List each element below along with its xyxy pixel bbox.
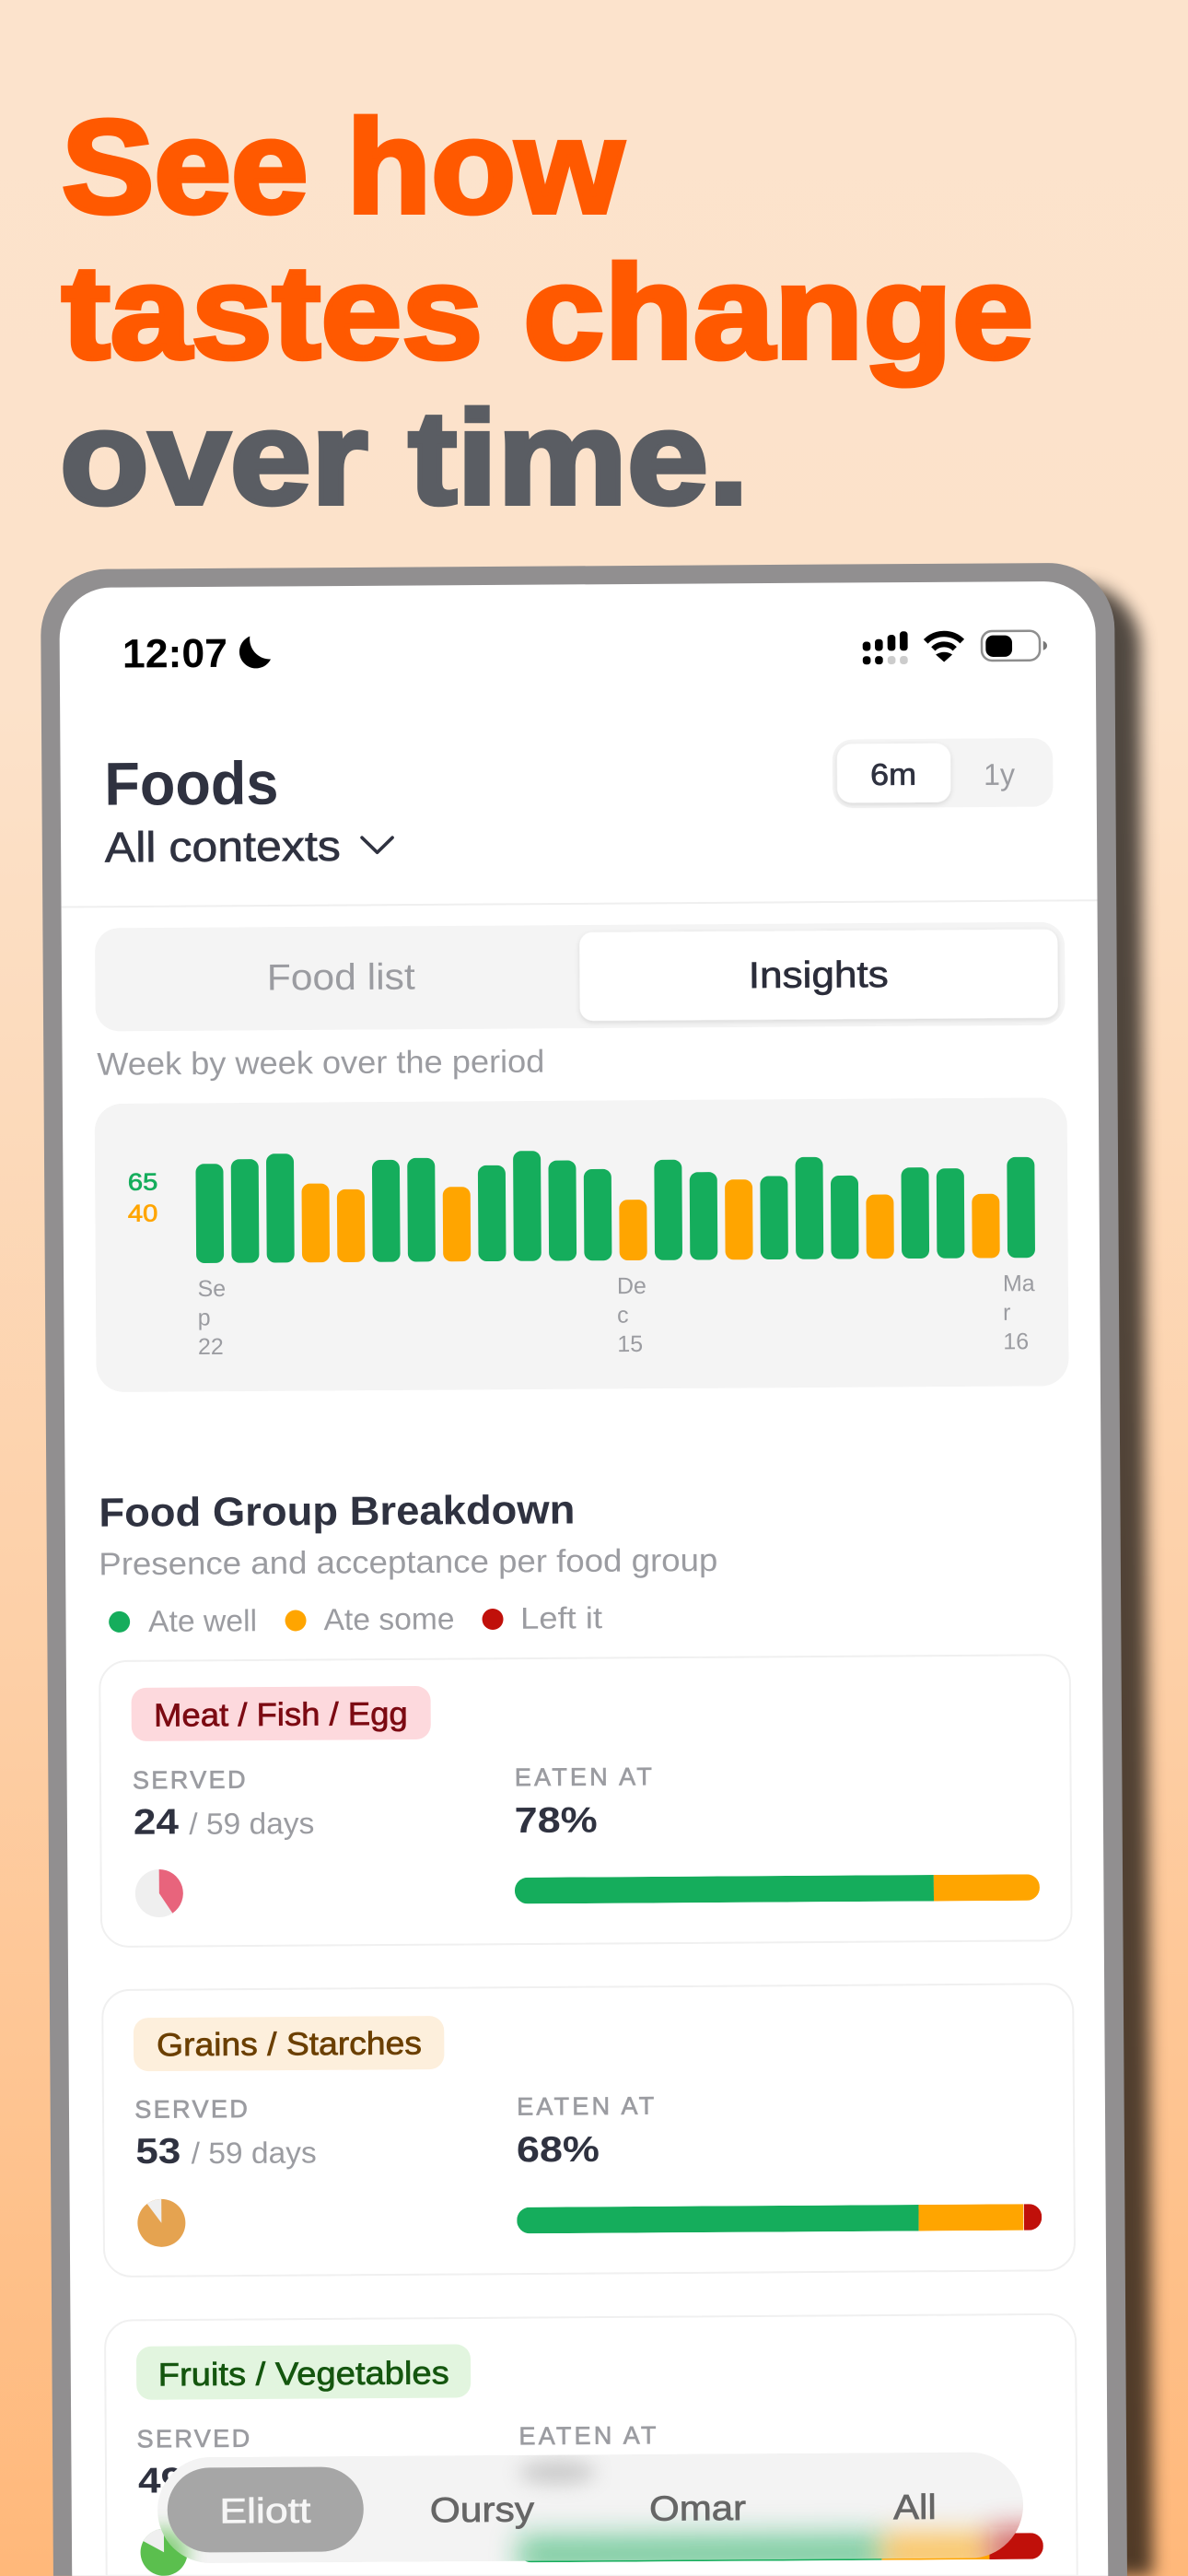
section subtitle: Presence and acceptance per food group — [99, 1543, 717, 1582]
eaten stat — [514, 1762, 652, 1841]
tabs: Insights — [749, 954, 889, 996]
phone screen — [59, 581, 1108, 2576]
chart date labels: 16 — [1003, 1329, 1029, 1354]
tabs: Food list — [267, 957, 415, 999]
selected tab: Eliott: Eliott — [219, 2492, 311, 2531]
tag: Meat / Fish / Egg — [154, 1696, 408, 1734]
icon: wifi — [926, 634, 962, 662]
eaten stat: 78% — [515, 1800, 598, 1841]
period toggle: 6m — [870, 757, 916, 791]
chart date labels: Se — [197, 1276, 226, 1302]
chart scale labels — [127, 1168, 158, 1227]
served stat — [136, 2425, 250, 2501]
pie chart — [137, 2199, 186, 2247]
served stat — [133, 1765, 314, 1843]
phone shadow — [66, 582, 1153, 2576]
chart scale labels: 65 — [128, 1168, 157, 1196]
pie chart — [135, 1869, 183, 1917]
icon: cellular signal — [863, 631, 908, 664]
panel: weekly chart — [95, 1097, 1069, 1392]
icon: chevron — [362, 837, 392, 852]
tabs — [95, 922, 1066, 1031]
stacked bar — [515, 1874, 1040, 1903]
served stat: SERVED — [133, 1766, 246, 1794]
clock: 12:07 — [122, 631, 227, 677]
legend: Ate well — [148, 1603, 257, 1638]
chart date labels: De — [617, 1273, 646, 1299]
served stat: 49 — [138, 2461, 183, 2501]
chart date labels: 15 — [617, 1331, 643, 1357]
chart date labels: 22 — [198, 1334, 224, 1360]
period toggle — [833, 738, 1054, 808]
title: tastes change — [62, 238, 1033, 387]
eaten stat — [517, 2092, 655, 2170]
title: over time. — [60, 383, 749, 533]
nav glass background — [157, 2453, 1023, 2563]
panel: Fruits / Vegetables — [105, 2314, 1077, 2576]
served stat: SERVED — [136, 2425, 250, 2453]
bottom navigation bar — [157, 2453, 1023, 2563]
icon: moon — [239, 637, 271, 669]
chart date labels: p — [198, 1305, 211, 1331]
stacked bar — [517, 2204, 1042, 2233]
chart date labels: c — [617, 1303, 629, 1329]
served stat: 53 — [135, 2132, 181, 2172]
status bar — [122, 626, 1047, 677]
tag: Grains / Starches — [157, 2025, 422, 2063]
title — [60, 92, 1033, 533]
selected tab: Eliott — [167, 2466, 364, 2553]
chart subtitle: Week by week over the period — [97, 1045, 544, 1083]
context dropdown: All contexts — [105, 822, 341, 871]
eaten stat: EATEN AT — [518, 2421, 657, 2450]
chart date labels: Ma — [1003, 1270, 1035, 1296]
title: See how — [62, 92, 624, 241]
panel: Grains / Starches — [102, 1984, 1075, 2277]
tag — [136, 2344, 471, 2400]
stacked bar — [518, 2533, 1043, 2562]
eaten stat: EATEN AT — [517, 2092, 654, 2121]
tag — [132, 1686, 431, 1741]
phone frame — [41, 563, 1127, 2576]
legend: Ate some — [323, 1601, 455, 1636]
served stat: 24 — [134, 1802, 179, 1843]
phone mockup — [41, 562, 1153, 2576]
pie chart — [140, 2529, 188, 2576]
tab: Omar: Omar — [649, 2489, 747, 2529]
served stat: / 59 days — [189, 1807, 314, 1841]
served stat: SERVED — [134, 2095, 248, 2124]
status icons — [863, 630, 1047, 664]
icon: battery — [982, 631, 1047, 661]
tab: Oursy: Oursy — [430, 2491, 534, 2530]
tag — [134, 2016, 444, 2071]
period toggle: 1y — [984, 757, 1016, 791]
heading: Food Group Breakdown: Food Group Breakdown — [99, 1487, 576, 1536]
heading: Foods: Foods — [104, 748, 279, 818]
tab: All: All — [893, 2488, 937, 2527]
served stat: / 59 days — [192, 2136, 317, 2170]
chart date labels: r — [1003, 1300, 1011, 1326]
legend: Left it — [520, 1600, 602, 1635]
served stat — [134, 2095, 317, 2172]
chart scale labels: 40 — [128, 1200, 157, 1227]
panel: Meat / Fish / Egg — [99, 1655, 1072, 1947]
eaten stat: EATEN AT — [515, 1762, 652, 1791]
chart date labels — [197, 1270, 1035, 1360]
header — [104, 738, 1054, 871]
bar chart — [195, 1148, 1035, 1263]
tag: Fruits / Vegetables — [158, 2355, 449, 2393]
eaten stat: 68% — [517, 2130, 600, 2170]
legend — [109, 1600, 602, 1638]
